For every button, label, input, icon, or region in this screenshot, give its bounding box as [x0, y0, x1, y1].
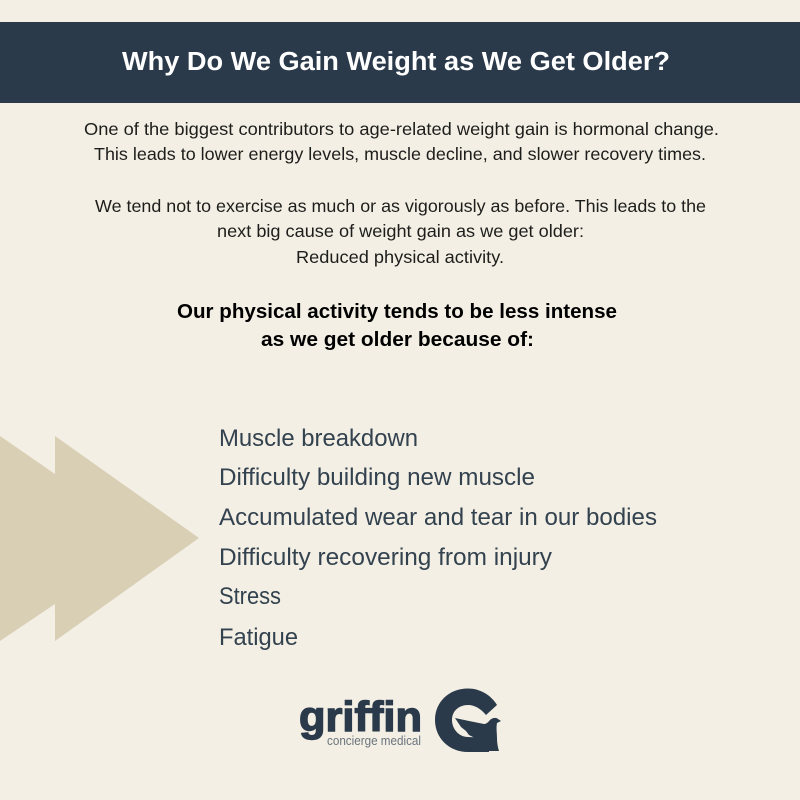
text block: hormonal change: [84, 119, 719, 164]
text block: reduced physical activity: Reduced physical activity.: [296, 247, 504, 267]
subheading: Our physical activity tends to be less intense: [177, 300, 617, 323]
text block: hormonal change: One of the biggest contributors to age-related weight gain is hormonal change.: [84, 119, 719, 139]
list of causes: [219, 425, 657, 651]
logo tagline: concierge medical: [327, 733, 421, 748]
list of causes: Difficulty recovering from injury: [219, 544, 552, 571]
list of causes: Difficulty building new muscle: [219, 464, 535, 491]
list of causes: Stress: [219, 583, 281, 610]
list of causes: Accumulated wear and tear in our bodies: [219, 504, 657, 531]
text block: reduced physical activity: next big cause of weight gain as we get older:: [217, 221, 584, 241]
logo wordmark: griffin: [299, 693, 422, 740]
text block: reduced physical activity: We tend not to exercise as much or as vigorously as before. This leads to the: [95, 196, 706, 216]
text block: reduced physical activity: [95, 196, 706, 267]
logo: griffin concierge medical: [299, 688, 501, 752]
list of causes: Muscle breakdown: [219, 425, 418, 452]
list of causes: Fatigue: [219, 624, 298, 651]
title: Why Do We Gain Weight as We Get Older?: [122, 48, 670, 76]
text block: hormonal change: This leads to lower energy levels, muscle decline, and slower recovery times.: [94, 144, 706, 164]
logo icon: G with griffin: [435, 688, 501, 752]
icon: double arrow: [0, 436, 199, 641]
header banner: [0, 22, 800, 103]
subheading: [177, 300, 617, 351]
subheading: as we get older because of:: [261, 328, 534, 351]
